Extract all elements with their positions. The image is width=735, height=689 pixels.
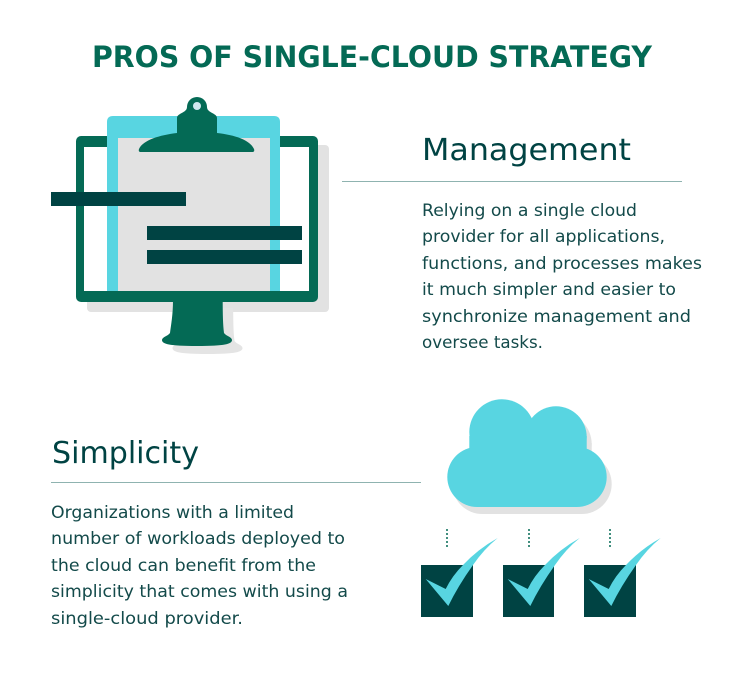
text block: Simplicity: the cloud can benefit from the (51, 556, 316, 575)
divider: Simplicity (51, 482, 421, 483)
icon: check box 1 (421, 538, 498, 617)
text block: Management: synchronize management and (422, 307, 691, 326)
icon: check box 2 (503, 538, 580, 617)
icon: cloud (447, 399, 612, 514)
text block: Management: Relying on a single cloud (422, 201, 637, 220)
icon: check box 3 (584, 538, 661, 617)
text block: Simplicity: single-cloud provider. (51, 609, 243, 628)
title: PROS OF SINGLE-CLOUD STRATEGY (92, 40, 653, 74)
heading: Management: Management (422, 133, 631, 168)
text block: Simplicity: number of workloads deployed to (51, 529, 345, 548)
text block: Simplicity: simplicity that comes with using a (51, 582, 348, 601)
text block: Management: oversee tasks. (422, 333, 543, 352)
text block: Management: functions, and processes makes (422, 254, 702, 273)
text block: Simplicity: Organizations with a limited (51, 503, 294, 522)
divider: Management (342, 181, 682, 182)
text block: Management: provider for all applications, (422, 227, 665, 246)
icon: monitor with clipboard (51, 97, 329, 354)
heading: Simplicity: Simplicity (52, 436, 199, 471)
text block: Simplicity (51, 503, 348, 628)
text block: Management: it much simpler and easier to (422, 280, 676, 299)
text block: Management (422, 201, 702, 352)
connector: dotted lines (447, 529, 610, 549)
